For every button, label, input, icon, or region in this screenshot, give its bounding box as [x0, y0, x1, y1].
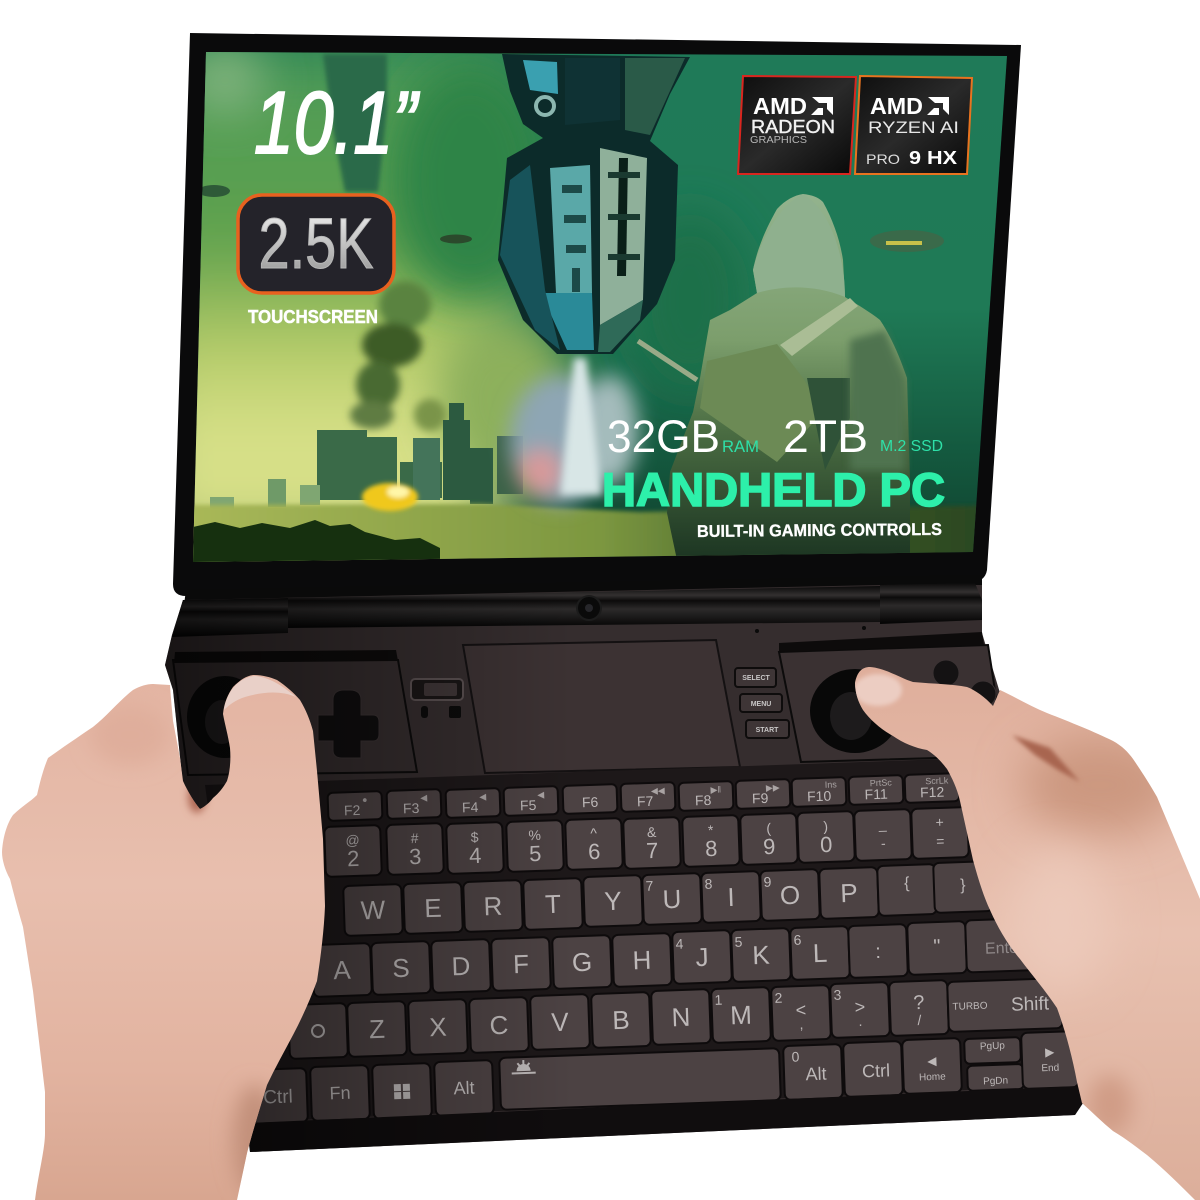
- shoulder strap: [780, 298, 858, 356]
- bottom key row: PgDn: [983, 1075, 1008, 1087]
- ship window blocks: [562, 185, 586, 292]
- qwerty key row: Y: [604, 886, 622, 916]
- select menu start buttons: MENU: [751, 701, 771, 708]
- left control panel: [173, 650, 417, 775]
- shift key row: Z: [369, 1014, 386, 1044]
- function key row: PrtSc: [870, 777, 892, 788]
- storage spec: M.2 SSD: [880, 438, 943, 455]
- face buttons: [933, 660, 996, 707]
- storage spec: [783, 411, 943, 462]
- home key row: 5: [734, 934, 743, 950]
- pale top left corner: [185, 45, 265, 115]
- left wrist edge shadow: [227, 1082, 266, 1190]
- qwerty key row: W: [360, 895, 386, 925]
- qwerty key row: T: [545, 889, 562, 919]
- badge: AMD Ryzen AI Pro 9 HX: 9 HX: [909, 148, 957, 168]
- function key row: ◀: [479, 792, 486, 802]
- right hand: [854, 667, 1200, 1200]
- number key row: _: [877, 816, 887, 832]
- yellow green left sky: [130, 50, 510, 565]
- bottom front lip: [249, 1086, 1083, 1152]
- beam core: [560, 358, 602, 495]
- bottom key row: Alt: [805, 1064, 827, 1084]
- number key row: 5: [529, 841, 542, 866]
- home key row: :: [875, 941, 881, 963]
- shift key row: /: [917, 1012, 922, 1028]
- select menu start buttons: [735, 668, 789, 738]
- function key row: ▶‖: [710, 784, 721, 795]
- home key row: [312, 918, 1051, 997]
- home key row: Enter: [985, 939, 1024, 958]
- number key row: %: [528, 827, 541, 843]
- touchscreen label: TOUCHSCREEN: [248, 307, 378, 327]
- shift key row: ,: [799, 1016, 804, 1032]
- screen size heading: 10.1”: [254, 73, 420, 172]
- left web shadow: [188, 781, 206, 813]
- city skyline: [210, 403, 523, 517]
- qwerty key row: R: [483, 891, 503, 921]
- home key row: 6: [793, 932, 802, 948]
- screen artwork: [193, 52, 1007, 562]
- shift key row: ?: [913, 992, 925, 1014]
- dark cloak: [807, 378, 850, 470]
- number key row: *: [708, 822, 714, 838]
- right cloak: [850, 330, 905, 470]
- qwerty key row: 7: [645, 878, 654, 894]
- bottom key row: Ctrl: [862, 1060, 890, 1081]
- thumb crease: [1012, 735, 1080, 782]
- function key row: ScrLk: [925, 775, 949, 786]
- badge: AMD Ryzen AI Pro 9 HX: AMD: [870, 93, 923, 119]
- central green haze: [390, 60, 550, 300]
- home key row: D: [451, 951, 471, 981]
- product headline: HANDHELD PC: [602, 463, 945, 516]
- function key row: F6: [582, 794, 599, 810]
- hooded figure: [667, 194, 910, 560]
- shift key row: 3: [833, 987, 842, 1003]
- shift key row: Shift: [1011, 993, 1050, 1016]
- left analog stick: [187, 676, 263, 758]
- shift key row: 1: [714, 992, 723, 1008]
- teal glow behind figure: [644, 218, 745, 344]
- hood fold: [753, 229, 845, 297]
- right thumb nail: [854, 674, 902, 706]
- function key row: F11: [864, 786, 888, 802]
- space bar: [499, 1048, 781, 1110]
- badge: AMD Radeon Graphics: RADEON: [751, 117, 835, 137]
- function key row: F10: [807, 788, 832, 804]
- explosion: [362, 483, 418, 511]
- wrist shadow: [1088, 1075, 1132, 1135]
- shift key row: >: [854, 997, 865, 1017]
- function key row: [328, 773, 959, 821]
- resolution badge: 2.5K: [258, 205, 374, 284]
- home key row: 4: [675, 936, 684, 952]
- bottom key row: ▶: [1045, 1045, 1055, 1059]
- shift key row: .: [858, 1013, 863, 1029]
- function key row: F2: [344, 802, 361, 818]
- badge: AMD Ryzen AI Pro 9 HX: PRO: [866, 151, 900, 167]
- function key row: ●: [362, 795, 368, 805]
- number key row: 7: [646, 838, 659, 863]
- left hand: [2, 675, 325, 1200]
- qwerty key row: I: [727, 882, 735, 912]
- shift key row: V: [551, 1007, 570, 1037]
- number key row: 8: [705, 836, 718, 861]
- laptop lid bezel: [173, 33, 1021, 596]
- bottom key row: Ctrl: [263, 1086, 293, 1109]
- keyboard: [248, 773, 1079, 1124]
- qwerty key row: O: [779, 880, 801, 910]
- badge: AMD Radeon Graphics: [738, 76, 856, 174]
- home key row: G: [571, 947, 593, 977]
- number key row: (: [766, 820, 772, 836]
- qwerty key row: 9: [763, 874, 772, 890]
- number key row: ^: [590, 825, 598, 841]
- shift key row: 2: [774, 990, 783, 1006]
- ground: [193, 501, 976, 562]
- number key row: @: [345, 832, 360, 848]
- qwerty key row: P: [840, 878, 858, 908]
- function key row: F9: [752, 790, 769, 806]
- home key row: ": [933, 936, 941, 958]
- AMD arrow mark: [811, 97, 833, 115]
- number key row: 2: [347, 846, 360, 871]
- shift key row: M: [730, 1000, 752, 1030]
- lit haze by the ship: [435, 320, 575, 480]
- function key row: ◀: [537, 790, 544, 800]
- badge: AMD Radeon Graphics: AMD: [753, 93, 807, 119]
- function key row: F3: [403, 800, 420, 816]
- function key row: F12: [920, 784, 945, 800]
- spaceship: [498, 54, 690, 354]
- back of hand tone: [1020, 735, 1180, 835]
- hinge bar: [288, 586, 880, 628]
- qwerty key row: 8: [704, 876, 713, 892]
- home key row: H: [632, 945, 652, 975]
- shift key row: X: [429, 1012, 447, 1042]
- controls caption: BUILT-IN GAMING CONTROLLS: [697, 520, 942, 541]
- bottom key row: Home: [919, 1072, 946, 1083]
- bottom key row: Alt: [453, 1078, 475, 1098]
- qwerty key row: E: [424, 893, 442, 923]
- backpack: [700, 344, 823, 462]
- badge: AMD Ryzen AI Pro 9 HX: RYZEN AI: [868, 118, 959, 137]
- number key row: 6: [588, 839, 601, 864]
- energy beam: [510, 375, 638, 505]
- left hinge block: [172, 598, 288, 637]
- right hinge block: [880, 583, 982, 624]
- left thumb nail: [224, 676, 296, 710]
- function key row: F7: [637, 793, 654, 809]
- shift key row: <: [795, 1000, 806, 1020]
- webcam: [577, 596, 601, 620]
- flying craft left: [202, 185, 230, 197]
- directional pad: [318, 690, 379, 758]
- number key row: [324, 807, 969, 877]
- qwerty key row: }: [960, 877, 967, 894]
- home key row: A: [333, 955, 352, 985]
- badge: AMD Radeon Graphics: GRAPHICS: [750, 135, 807, 146]
- resolution badge: [238, 195, 394, 293]
- bottom key row: Fn: [329, 1083, 351, 1103]
- palm highlight: [1010, 850, 1110, 990]
- number key row: 9: [763, 834, 776, 859]
- function key row: F8: [695, 792, 712, 808]
- home key row: S: [392, 953, 410, 983]
- shift key row: TURBO: [952, 1001, 988, 1013]
- background tower: [323, 54, 387, 192]
- qwerty key row: U: [662, 884, 682, 914]
- shift key row: B: [612, 1005, 630, 1035]
- function key row: F5: [520, 797, 537, 813]
- number key row: -: [881, 835, 886, 851]
- home key row: F: [513, 949, 529, 979]
- microphone dots: [755, 626, 866, 633]
- touchpad: [463, 640, 740, 773]
- shift key row: C: [489, 1010, 509, 1040]
- flying craft right: [870, 230, 944, 252]
- smoke plume: [350, 281, 446, 431]
- right analog stick: [810, 669, 900, 753]
- memory spec: RAM: [722, 437, 759, 456]
- flying craft centre: [440, 234, 472, 244]
- function key row: ◀: [420, 793, 427, 803]
- home key row: L: [812, 938, 828, 968]
- function key row: Ins: [825, 779, 837, 790]
- number key row: ): [823, 818, 828, 834]
- bottom key row: ◀: [927, 1054, 937, 1068]
- left side shadow on device: [165, 590, 750, 1152]
- shift key row: [288, 978, 1063, 1059]
- number key row: #: [410, 830, 419, 846]
- bottom key row: End: [1041, 1063, 1059, 1074]
- home key row: J: [695, 942, 709, 972]
- memory spec: 32GB: [607, 411, 720, 462]
- rifle: [638, 341, 697, 380]
- badge: AMD Ryzen AI Pro 9 HX: [855, 76, 972, 174]
- bottom key row: [248, 1031, 1079, 1124]
- home key row: K: [752, 940, 771, 970]
- number key row: =: [936, 833, 945, 849]
- mode switch: [411, 679, 463, 718]
- function key row: F4: [462, 799, 479, 815]
- select menu start buttons: START: [756, 727, 779, 734]
- qwerty key row: [343, 861, 993, 936]
- number key row: +: [935, 814, 944, 830]
- lid to hinge join: [183, 575, 982, 612]
- AMD arrow mark: [927, 97, 949, 115]
- number key row: 4: [469, 843, 482, 868]
- right control panel: [779, 632, 1005, 762]
- qwerty key row: {: [904, 875, 910, 892]
- device base: [165, 585, 1083, 1152]
- function key row: ◀◀: [651, 785, 665, 796]
- bottom key row: 0: [791, 1048, 800, 1065]
- function key row: ▶▶: [766, 782, 780, 793]
- number key row: 0: [820, 832, 833, 857]
- select menu start buttons: SELECT: [742, 675, 771, 682]
- number key row: &: [647, 824, 657, 840]
- ship hull clamps: [608, 172, 640, 260]
- shift key row: N: [671, 1002, 691, 1032]
- number key row: $: [470, 829, 479, 845]
- bottom key row: PgUp: [980, 1041, 1006, 1052]
- left knuckle tone: [88, 702, 160, 758]
- keyboard bed: [205, 757, 1080, 1122]
- storage spec: 2TB: [783, 411, 868, 462]
- foreground trees: [193, 520, 440, 562]
- number key row: 3: [409, 844, 422, 869]
